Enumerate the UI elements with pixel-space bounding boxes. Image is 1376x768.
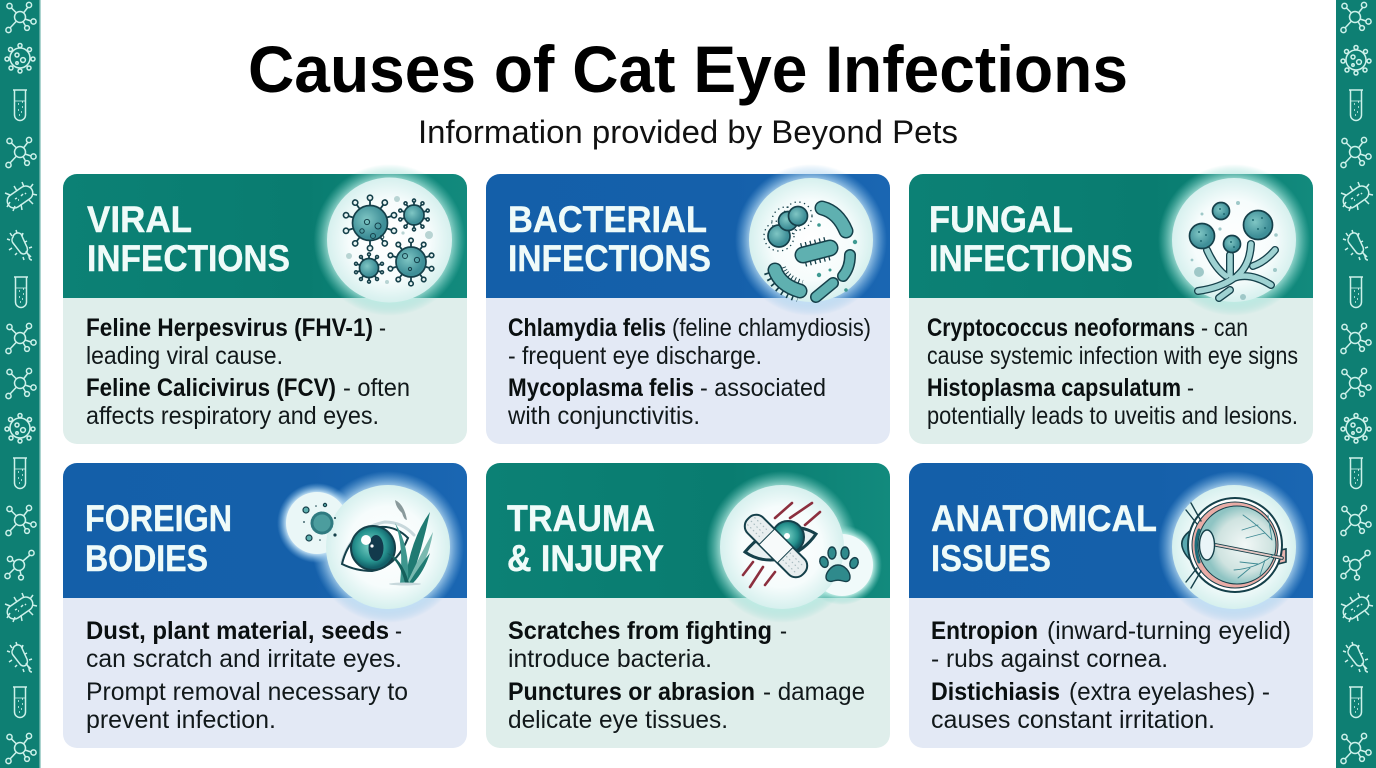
heading: BACTERIAL	[508, 199, 707, 240]
panel body	[486, 596, 890, 748]
heading: INFECTIONS	[87, 238, 290, 279]
panel body	[909, 296, 1313, 444]
text block: causes constant irritation.	[931, 706, 1215, 734]
text block: Punctures or abrasion	[508, 678, 755, 706]
text block: -	[780, 617, 787, 645]
text block: -	[379, 314, 386, 342]
text block	[86, 617, 408, 734]
icon: fungi	[1158, 164, 1310, 316]
text block: -	[1187, 374, 1194, 402]
heading: FUNGAL	[929, 199, 1073, 240]
icon: viruses	[314, 164, 466, 316]
panel body	[486, 296, 890, 444]
subtitle: Information provided by Beyond Pets	[418, 114, 958, 150]
text block: - can	[1201, 314, 1248, 342]
text block: (feline chlamydiosis)	[672, 314, 871, 342]
text block: Dust, plant material, seeds	[86, 617, 389, 645]
heading: ISSUES	[931, 538, 1051, 579]
text block: Cryptococcus neoformans	[927, 314, 1195, 342]
text block: Mycoplasma felis	[508, 374, 694, 402]
panel body	[63, 596, 467, 748]
heading: TRAUMA	[507, 498, 655, 539]
panel header	[486, 463, 890, 598]
panel: bacterial infections	[486, 164, 890, 444]
heading: FOREIGN	[85, 498, 232, 539]
text block	[507, 314, 871, 430]
text block: - damage	[763, 678, 865, 706]
panel header	[909, 463, 1313, 598]
text block: -	[395, 617, 402, 645]
panel: viral infections	[63, 164, 467, 444]
text block	[927, 314, 1298, 430]
icon: bacteria	[735, 164, 887, 316]
heading: INFECTIONS	[508, 238, 711, 279]
text block	[931, 617, 1291, 734]
panel header	[63, 463, 467, 598]
panel: fungal infections	[909, 164, 1313, 444]
panel header	[909, 174, 1313, 298]
heading	[87, 199, 290, 279]
text block	[86, 314, 410, 430]
heading: BODIES	[85, 538, 208, 579]
left sidebar	[0, 0, 40, 768]
text block: Chlamydia felis	[508, 314, 666, 342]
title: Causes of Cat Eye Infections	[248, 32, 1128, 106]
text block: - often	[343, 374, 410, 402]
icon: eye with plant and dust	[277, 471, 464, 623]
icon: eye anatomy cross-section	[1158, 471, 1310, 623]
text block	[508, 617, 865, 734]
icon: bandaged eye and paw	[706, 471, 882, 623]
text block: with conjunctivitis.	[507, 402, 700, 430]
text block: (extra eyelashes) -	[1069, 678, 1270, 706]
text block: Feline Calicivirus (FCV)	[86, 374, 336, 402]
text block: cause systemic infection with eye signs	[927, 342, 1298, 370]
text block: - rubs against cornea.	[931, 645, 1168, 673]
text block: potentially leads to uveitis and lesions.	[927, 402, 1298, 430]
panel: foreign bodies	[63, 463, 467, 748]
heading: & INJURY	[507, 538, 664, 579]
text block: Entropion	[931, 617, 1038, 645]
heading: INFECTIONS	[929, 238, 1133, 279]
heading	[507, 498, 664, 579]
text block: leading viral cause.	[86, 342, 283, 370]
heading	[508, 199, 711, 279]
heading	[929, 199, 1133, 279]
heading	[931, 498, 1157, 579]
panel header	[486, 174, 890, 298]
heading	[85, 498, 232, 579]
panel body	[63, 296, 467, 444]
panel header	[63, 174, 467, 298]
text block: - associated	[700, 374, 826, 402]
text block: prevent infection.	[86, 706, 276, 734]
text block: can scratch and irritate eyes.	[86, 645, 402, 673]
text block: introduce bacteria.	[508, 645, 712, 673]
text block: Prompt removal necessary to	[86, 678, 408, 706]
right sidebar	[1336, 0, 1376, 768]
panel: anatomical issues	[909, 463, 1313, 748]
text block: (inward-turning eyelid)	[1047, 617, 1291, 645]
text block: Distichiasis	[931, 678, 1060, 706]
text block: affects respiratory and eyes.	[86, 402, 379, 430]
panel: trauma and injury	[486, 463, 890, 748]
text block: - frequent eye discharge.	[508, 342, 762, 370]
panel body	[909, 596, 1313, 748]
heading: ANATOMICAL	[931, 498, 1157, 539]
text block: Scratches from fighting	[508, 617, 772, 645]
text block: Feline Herpesvirus (FHV-1)	[86, 314, 373, 342]
heading: VIRAL	[87, 199, 192, 240]
text block: delicate eye tissues.	[508, 706, 728, 734]
text block: Histoplasma capsulatum	[927, 374, 1181, 402]
